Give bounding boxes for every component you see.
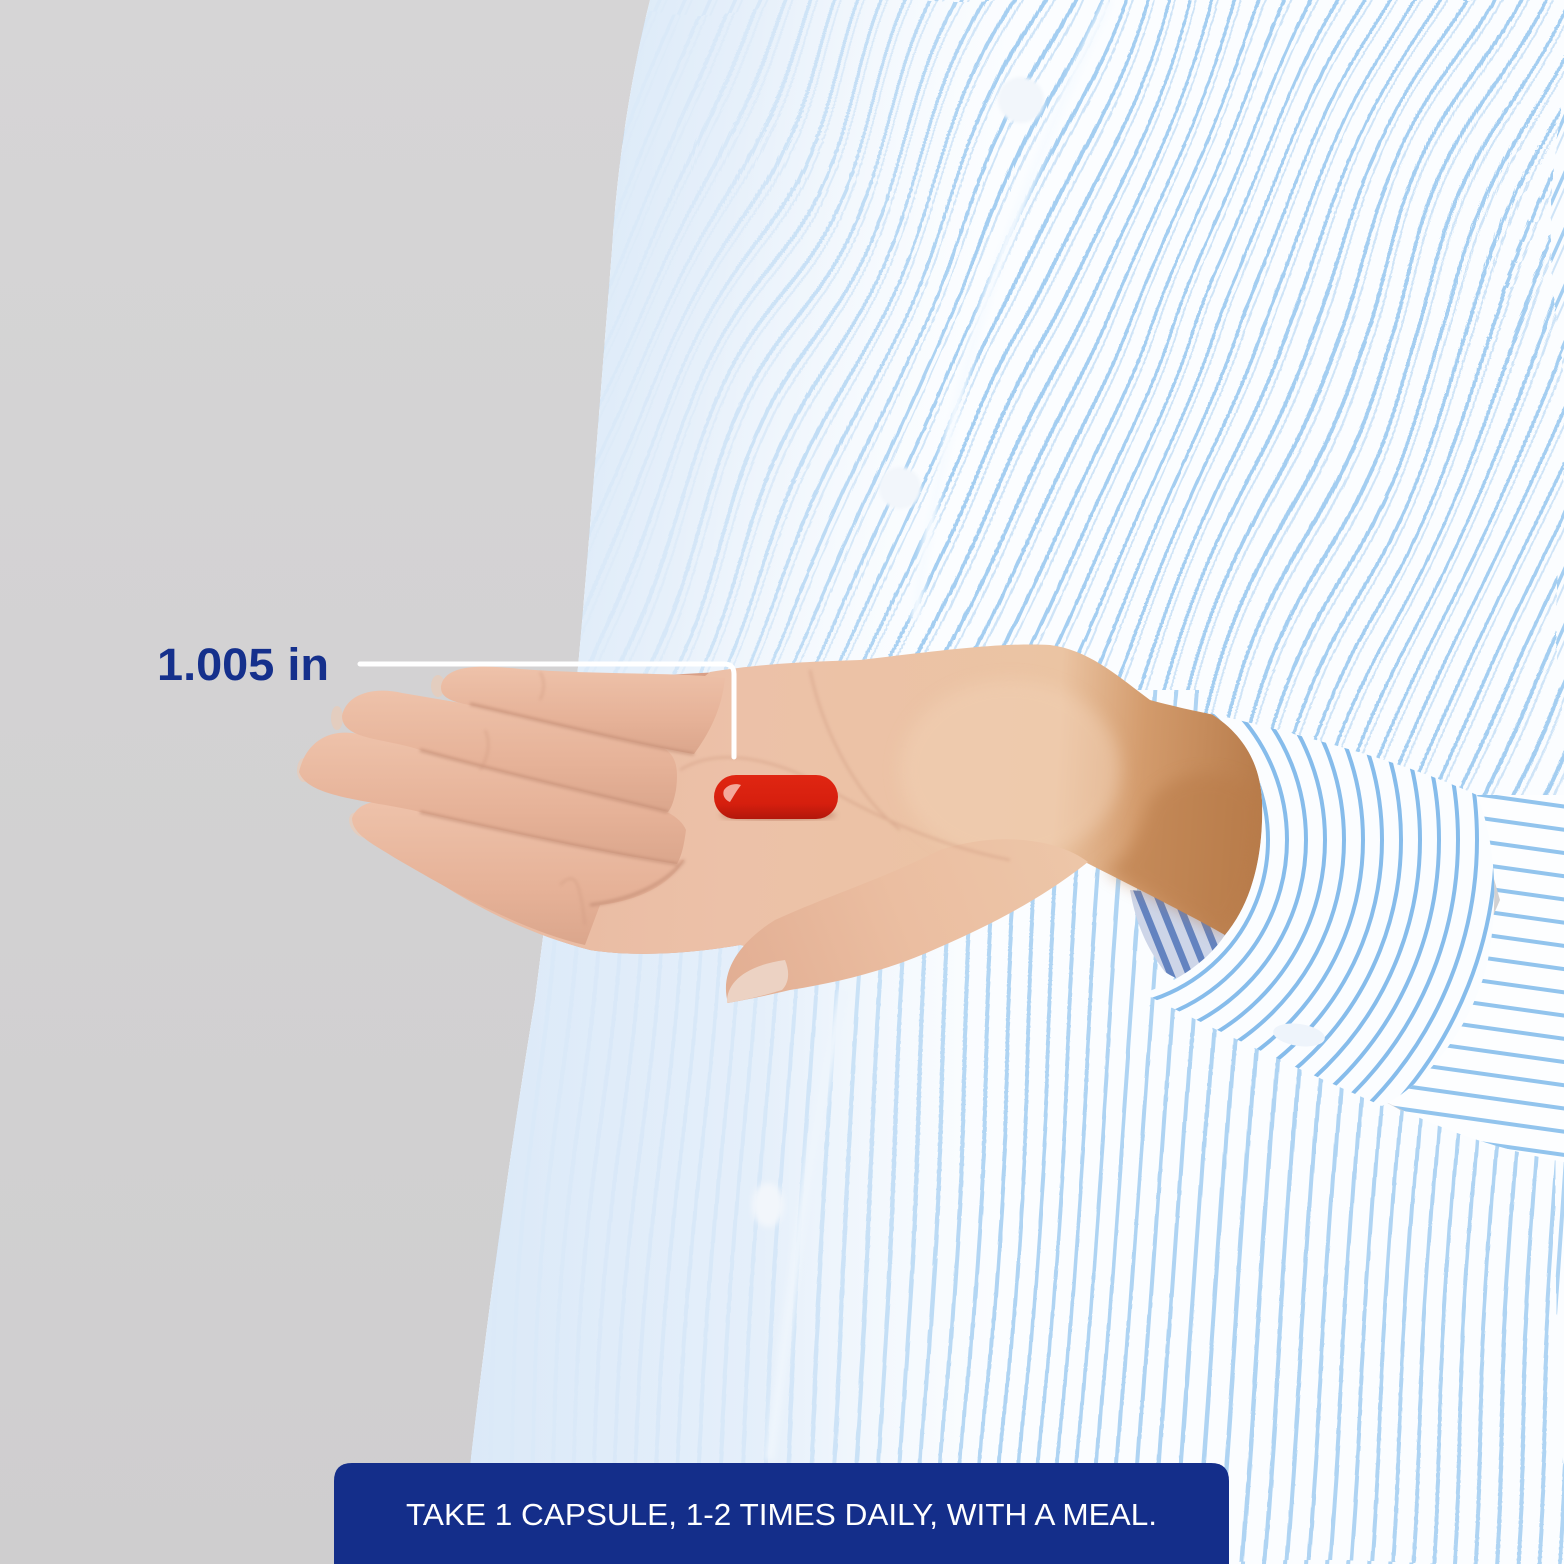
upper shirt stripes <box>578 0 1564 795</box>
shirt placket fold <box>915 0 1110 620</box>
hand inner fill <box>410 672 740 954</box>
palm creases <box>480 670 1010 925</box>
shirt cuff <box>1150 713 1494 1106</box>
measurement line <box>360 664 734 757</box>
shirt button top <box>998 77 1044 123</box>
shirt button lower <box>752 1183 784 1227</box>
capsule body <box>714 775 838 819</box>
capsule shadow <box>720 810 836 820</box>
cuff button <box>1272 1020 1326 1050</box>
index finger <box>441 667 725 754</box>
middle finger <box>342 691 677 812</box>
measurement label: 1.005 in <box>157 639 329 690</box>
striped shirt body <box>470 0 1564 1564</box>
concentric cuff stripes <box>1152 713 1494 1102</box>
finger nails peeking out <box>297 675 445 842</box>
instruction banner <box>334 1463 1229 1564</box>
ring finger <box>299 733 686 864</box>
inner sleeve shadow <box>1130 890 1240 984</box>
capsule highlight <box>723 784 741 802</box>
little finger <box>352 802 684 945</box>
shirt button middle <box>879 467 921 509</box>
thumb nail <box>727 960 788 1003</box>
hand <box>297 644 1262 1003</box>
banner background <box>334 1463 1229 1564</box>
finger separations <box>420 704 694 905</box>
palm and wrist <box>420 644 1262 960</box>
rolled sleeve <box>1388 795 1564 1162</box>
thumb <box>726 839 1088 1003</box>
lower shirt stripes <box>470 690 1564 1564</box>
wrist shadow <box>1105 774 1262 935</box>
lower placket fold <box>770 990 845 1460</box>
palm highlight <box>900 680 1120 860</box>
red capsule <box>714 775 838 820</box>
banner text: TAKE 1 CAPSULE, 1-2 TIMES DAILY, WITH A MEAL. <box>406 1497 1157 1532</box>
